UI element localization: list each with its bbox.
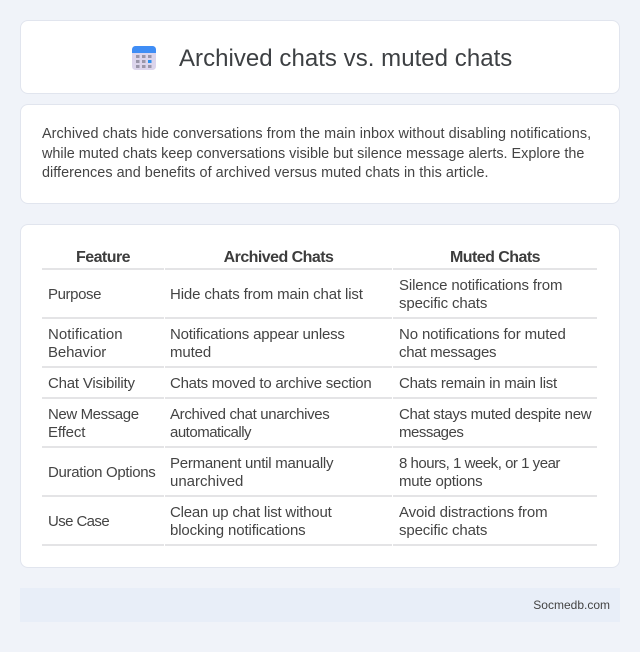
table header: Archived Chats [224,249,333,266]
table rows: Clean up chat list without [170,504,332,521]
table rows: blocking notifications [170,522,306,539]
table rows: Chat Visibility [48,375,135,392]
table rows: Chats remain in main list [399,375,557,392]
table rows: No notifications for muted [399,326,566,343]
table rows: Notifications appear unless [170,326,345,343]
panel: comparison table [20,224,620,568]
table rows: Behavior [48,344,106,361]
table rows: Permanent until manually [170,455,333,472]
table rows: automatically [170,424,251,441]
table rows: Archived chat unarchives [170,406,329,423]
table rows: Notification [48,326,123,343]
table rows: Use Case [48,513,109,530]
panel: title card [20,20,620,94]
footer credit: Socmedb.com [533,598,610,612]
intro paragraph [42,126,591,181]
panel: intro text [20,104,620,204]
table rows [42,268,597,546]
table rows: Chats moved to archive section [170,375,371,392]
table rows: specific chats [399,522,487,539]
footer bar [20,588,620,622]
table rows: Silence notifications from [399,277,562,294]
icon: calendar [132,46,156,70]
table rows: unarchived [170,473,243,490]
table header: Feature [76,249,130,266]
intro paragraph: while muted chats keep conversations visible but silence message alerts. Explore the [42,146,584,162]
intro paragraph: differences and benefits of archived versus muted chats in this article. [42,165,489,181]
table rows: specific chats [399,295,487,312]
table rows: Duration Options [48,464,155,481]
table header [76,249,540,266]
table rows: Effect [48,424,85,441]
table rows: chat messages [399,344,496,361]
table rows: New Message [48,406,139,423]
table rows: muted [170,344,211,361]
table rows: Hide chats from main chat list [170,286,363,303]
table rows: mute options [399,473,482,490]
intro paragraph: Archived chats hide conversations from the main inbox without disabling notifications, [42,126,591,142]
table header: Muted Chats [450,249,540,266]
table rows: Avoid distractions from [399,504,547,521]
table rows: 8 hours, 1 week, or 1 year [399,455,560,472]
table rows: messages [399,424,463,441]
table rows: Chat stays muted despite new [399,406,591,423]
title: Archived chats vs. muted chats [179,45,512,72]
table rows: Purpose [48,286,101,303]
